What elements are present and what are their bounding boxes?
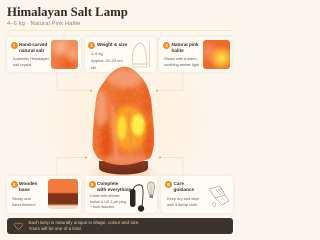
image: glowing salt [203, 40, 230, 69]
badge 4: 4 [13, 182, 15, 186]
subtitle: 4–6 kg · Natural Pink Halite [7, 21, 80, 27]
heading: with everything [97, 187, 131, 192]
description: Sturdy and [12, 196, 31, 200]
description [164, 56, 200, 67]
heading: Natural pink [172, 42, 199, 47]
description: 4–6 kg [91, 51, 103, 56]
heading: base [19, 187, 30, 192]
connector lines [56, 72, 184, 176]
badge 1 [10, 42, 18, 49]
panel: hand-carved natural salt [7, 37, 81, 72]
badge 2: 2 [90, 43, 93, 48]
heading: natural salt [19, 48, 44, 53]
badge 1: 1 [13, 43, 15, 48]
salt crystal body [92, 66, 154, 165]
description: switch & UK 3-pin plug [90, 200, 126, 204]
heading: halite [172, 48, 184, 53]
icon: lamp outline with height bar [132, 42, 150, 68]
heading [19, 42, 48, 53]
icon: heart [14, 222, 23, 230]
heading: Wooden [19, 181, 37, 186]
image: wooden base [48, 179, 78, 209]
description: Cable with dimmer [90, 194, 120, 198]
badge 3: 3 [165, 43, 168, 48]
description: salt crystal [13, 62, 31, 67]
description [90, 194, 126, 209]
heading: Hand-carved [19, 42, 47, 47]
footer text: Each lamp is naturally unique in shape, colour and size. [28, 220, 140, 225]
heading: guidance [174, 187, 194, 192]
description: Approx. 20–25 cm [91, 58, 123, 63]
heading [174, 181, 194, 192]
panel: care guidance [161, 176, 233, 213]
panel: wooden base [7, 176, 81, 213]
description: tall [91, 65, 96, 70]
description: Keep dry and wipe [167, 196, 199, 200]
image: salt crystal [51, 40, 78, 69]
description: Glows with a warm, [164, 56, 198, 60]
heading: Care [174, 181, 184, 186]
badge 2 [88, 42, 95, 49]
heading [172, 42, 199, 53]
heading: Weight & size [97, 42, 127, 47]
panel: complete with everything [85, 176, 157, 213]
description: + bulb included [90, 205, 114, 209]
illustration: salt lamp [91, 66, 156, 176]
description [91, 51, 123, 70]
lamp base [88, 161, 160, 181]
panel: weight and size [85, 37, 156, 72]
description [12, 196, 36, 206]
description: soothing amber light [164, 62, 199, 66]
badge 6: 6 [167, 182, 170, 186]
footer note [7, 218, 233, 234]
footer text: Yours will be one of a kind. [28, 226, 82, 231]
heading [19, 181, 38, 192]
badge 5 [88, 180, 96, 188]
description: hand-finished [12, 202, 35, 206]
badge 3 [163, 42, 170, 49]
description [167, 196, 200, 207]
badge 6 [165, 180, 172, 188]
icon: hand wiping [208, 186, 230, 207]
badge 5: 5 [91, 182, 93, 186]
heading: Complete [97, 181, 118, 186]
description: Authentic Himalayan [13, 56, 49, 61]
description [13, 56, 49, 67]
icon: cable, plug and bulb [130, 182, 155, 212]
description: with a damp cloth [167, 202, 197, 206]
footer text [28, 220, 140, 231]
background glow [30, 45, 220, 195]
title: Himalayan Salt Lamp [7, 5, 128, 19]
badge 4 [10, 180, 18, 188]
heading [97, 181, 132, 192]
header divider [7, 30, 233, 31]
panel: natural pink halite [159, 37, 232, 72]
